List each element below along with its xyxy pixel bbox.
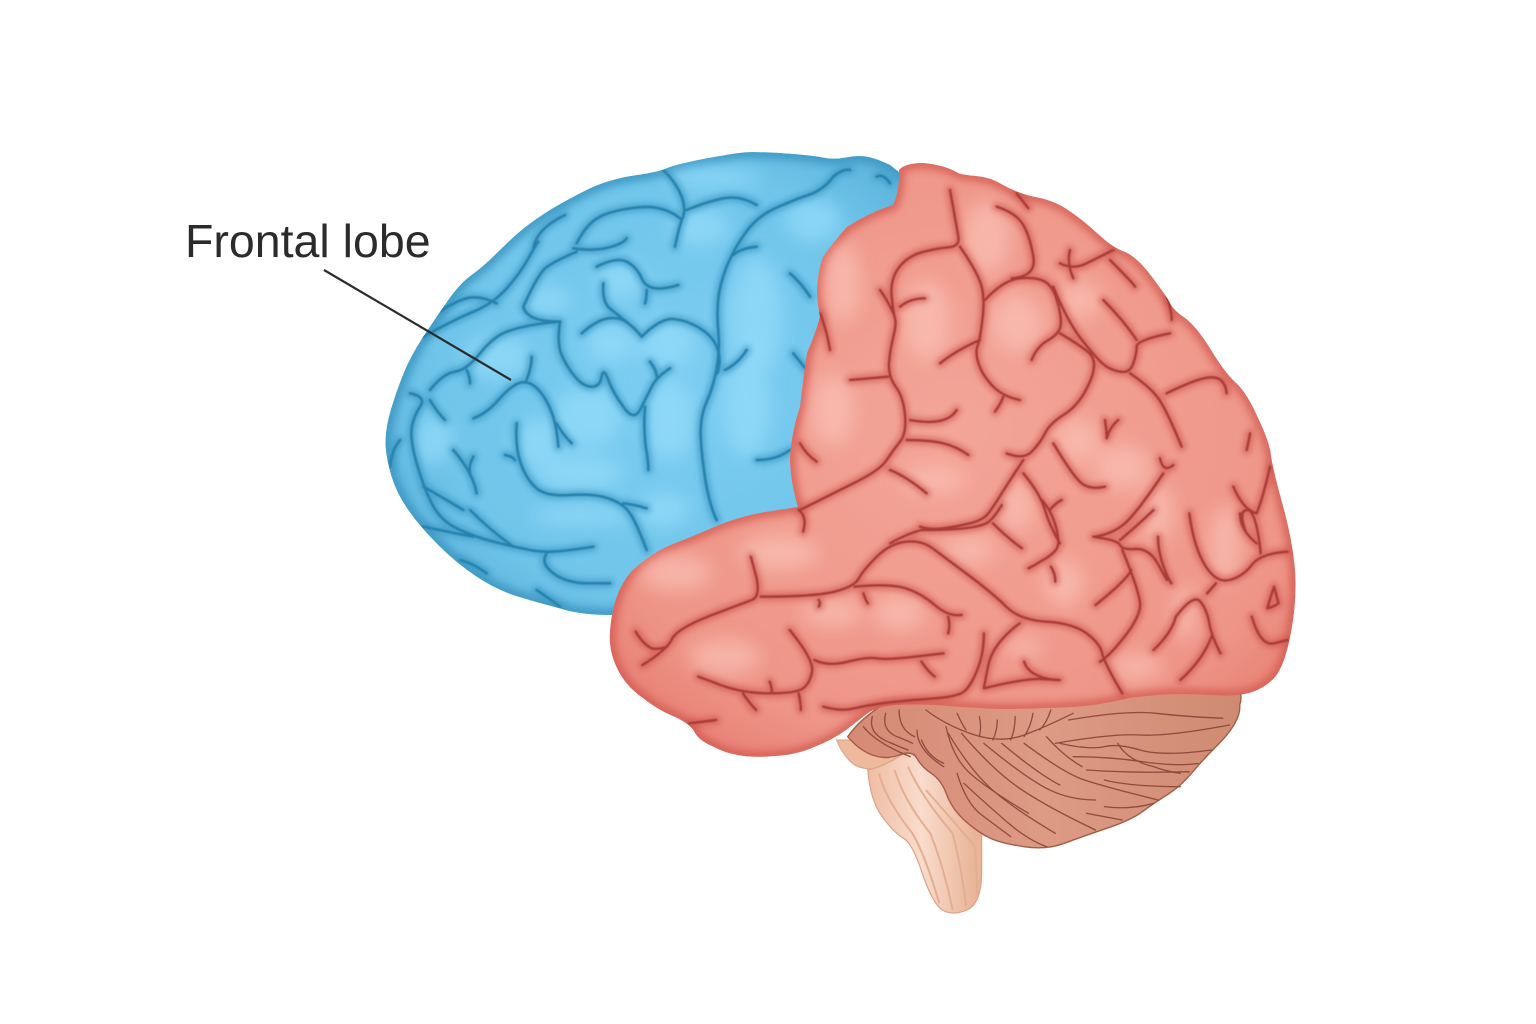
brain diagram with frontal lobe label xyxy=(188,152,1296,914)
brainstem xyxy=(837,740,1002,913)
label: Frontal lobe: Frontal lobe xyxy=(185,215,431,267)
lobe: frontal (blue) xyxy=(386,152,913,615)
cerebellum xyxy=(848,687,1241,848)
lobes: parietal, occipital and temporal (red) xyxy=(610,163,1296,757)
leader line xyxy=(324,270,511,380)
